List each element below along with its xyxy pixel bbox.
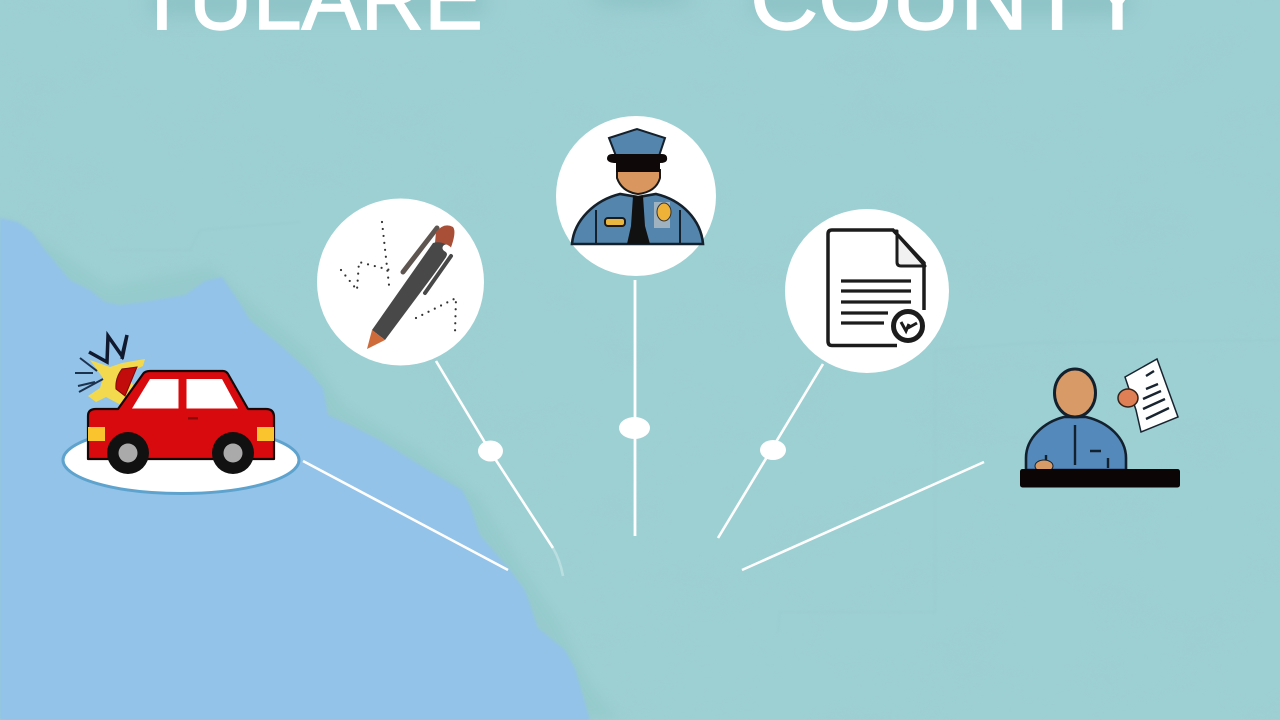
title [135, 0, 1149, 49]
connector: officer [619, 280, 650, 536]
connector: car [303, 461, 508, 570]
icon: person at desk [1020, 359, 1180, 488]
wheels [107, 432, 254, 474]
badge [654, 202, 671, 228]
name tag [605, 218, 625, 226]
document text lines [841, 281, 911, 323]
pen barrel [372, 242, 452, 340]
icon: crashed car [63, 335, 299, 494]
shirt placket [1046, 425, 1108, 468]
icon: police officer [556, 116, 716, 276]
person torso [1026, 417, 1126, 470]
officer uniform [572, 194, 703, 244]
uniform seams [596, 210, 680, 244]
officer face [617, 170, 660, 194]
crash burst [75, 335, 145, 405]
pen clip arm [425, 256, 451, 293]
pen circle [317, 198, 484, 366]
car platform [63, 426, 299, 494]
darker coastal land band [0, 218, 620, 720]
pen tip [367, 330, 385, 349]
ocean [0, 218, 590, 720]
hat brim [607, 154, 667, 172]
officer hat [609, 129, 665, 156]
connector: document [718, 364, 823, 538]
person head [1054, 369, 1096, 417]
car windows [132, 379, 238, 408]
tie [627, 196, 650, 244]
document seal [894, 312, 922, 340]
icon: document [785, 209, 949, 373]
officer circle [556, 116, 716, 276]
signature dots [341, 222, 456, 333]
pen cap [435, 225, 454, 250]
icon: pen [317, 198, 484, 366]
document circle [785, 209, 949, 373]
connector: pen [436, 361, 563, 576]
raised hand [1118, 389, 1138, 407]
door handle [188, 417, 198, 420]
document page [828, 230, 924, 346]
desk [1020, 469, 1180, 488]
folded corner [894, 231, 925, 266]
headlights [88, 427, 274, 441]
pen grip [403, 228, 437, 272]
land contour marks [110, 222, 1280, 632]
connector: claims adjuster [742, 462, 984, 570]
resting hand [1035, 460, 1053, 472]
car body [88, 371, 274, 459]
pen clip [424, 248, 450, 295]
held paper [1125, 359, 1178, 432]
title shadow [150, 0, 1130, 14]
